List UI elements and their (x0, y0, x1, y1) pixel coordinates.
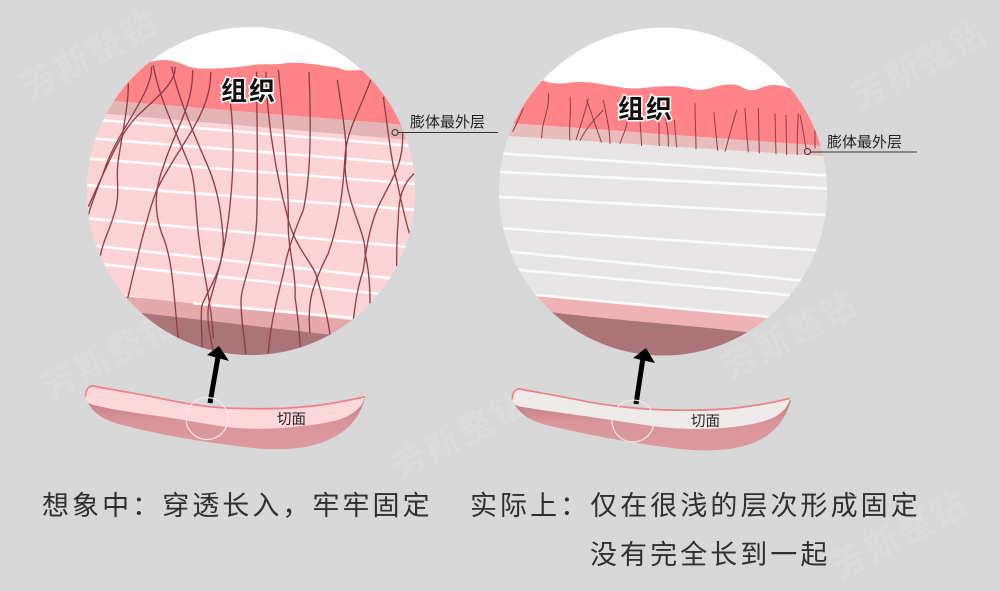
label: tissue left: 组织 (221, 76, 277, 106)
caption: actual line one: 实际上：仅在很浅的层次形成固定 (470, 491, 921, 521)
slice underside (515, 400, 791, 450)
caption: actual line two: 没有完全长到一起 (590, 540, 830, 570)
fusion band (508, 124, 823, 156)
implant slice right (512, 389, 791, 450)
callout: outermost implant layer right (804, 134, 917, 154)
fibers stopping at surface (513, 93, 815, 155)
callout: outermost implant layer right: 膨体最外层 (827, 134, 902, 151)
tissue layer (114, 60, 401, 124)
tissue layer (514, 80, 820, 146)
slice cut face (512, 389, 790, 429)
implant body (87, 114, 415, 320)
slice top edge (86, 386, 365, 409)
arrow left (207, 346, 229, 403)
watermarks: 芳斯整钻 (826, 484, 974, 587)
lower band (125, 296, 352, 355)
arrow right (633, 348, 655, 404)
callout: outermost implant layer left: 膨体最外层 (410, 114, 485, 131)
watermarks: 芳斯整钻 (16, 4, 164, 107)
slice top edge (512, 389, 790, 410)
magnifier ring right (612, 400, 654, 442)
watermarks: 芳斯整钻 (386, 384, 534, 487)
panel: imagined result magnified circle (87, 27, 415, 355)
underside shadow (142, 313, 330, 355)
implant stripes (83, 120, 417, 318)
implant slice left (86, 386, 365, 449)
watermarks: 芳斯整钻 (36, 304, 184, 407)
panel: actual result magnified circle (499, 28, 827, 356)
watermarks: 芳斯整钻 (716, 284, 864, 387)
fibers penetrating implant (88, 65, 414, 354)
implant stripes (495, 153, 830, 317)
slice underside (88, 398, 365, 449)
lower band (537, 296, 768, 356)
watermarks: 芳斯整钻 (846, 14, 994, 117)
label: tissue right: 组织 (618, 94, 674, 124)
fusion band (106, 101, 407, 140)
callout: outermost implant layer left (392, 114, 498, 136)
implant body (499, 136, 827, 316)
slice cut face (86, 386, 365, 429)
underside shadow (552, 312, 748, 356)
magnifier ring left (186, 398, 228, 440)
label: cut face left: 切面 (277, 412, 306, 428)
caption: imagined: 想象中：穿透长入，牢牢固定 (42, 491, 433, 521)
label: cut face right: 切面 (691, 414, 720, 430)
